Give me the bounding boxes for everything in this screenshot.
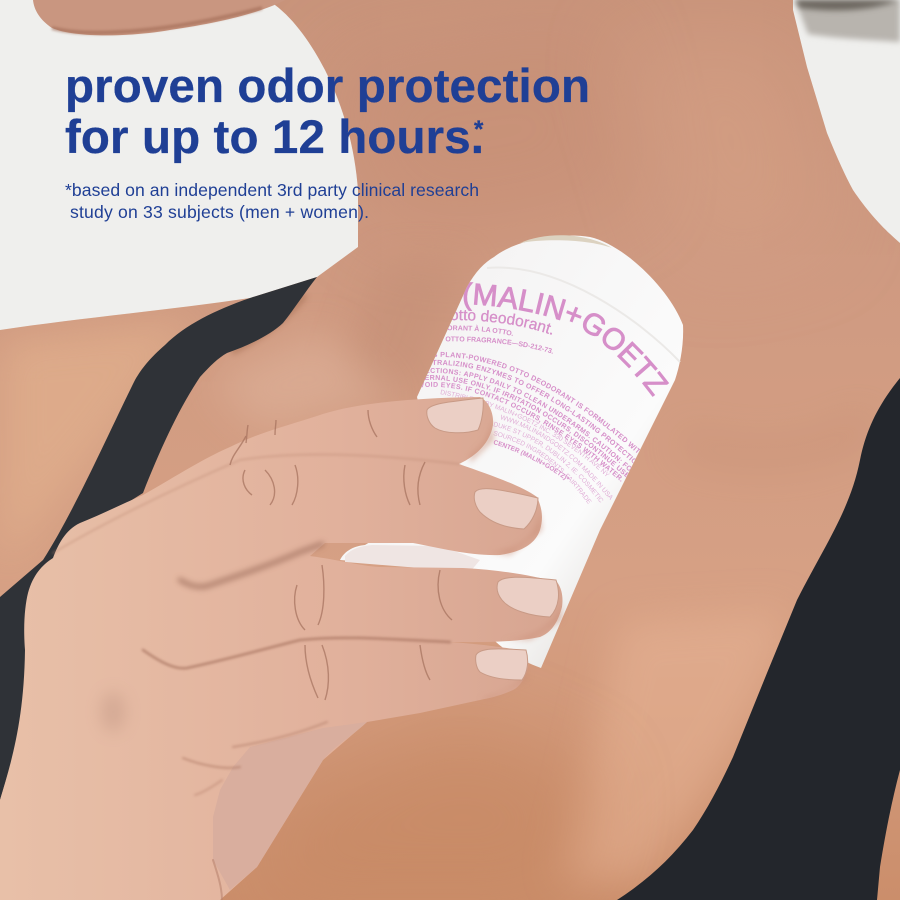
black top: left strap: [0, 277, 317, 800]
black top: right panel: [617, 378, 900, 900]
product label text: NEUTRALIZING ENZYMES TO OFFER LONG-LASTING PROTECTION.: [434, 360, 636, 464]
lower tube shade: [345, 545, 480, 572]
product label text: THIS PLANT-POWERED OTTO DEODORANT IS FORMULATED WITH: [435, 352, 640, 453]
product label text: WWW.MALINANDGOETZ.COM MADE IN USA: [501, 414, 612, 500]
knuckle creases: [230, 410, 452, 700]
product label text: OTTO FRAGRANCE—SD-212-73.: [446, 336, 553, 354]
footnote: *based on an independent 3rd party clinical research: [65, 180, 479, 200]
product label text: AVOID EYES. IF CONTACT OCCURS, RINSE EYES WITH WATER. DM: [422, 382, 622, 482]
product label text: [422, 282, 670, 504]
product label text: SOURCED INGREDIENTS. FAIRTRADE: [494, 431, 592, 504]
fingertip shading: [470, 415, 562, 700]
headline: [65, 60, 590, 164]
headline: *: [474, 116, 484, 143]
chin: [33, 0, 285, 35]
hand silhouette: [0, 397, 562, 900]
headline: proven odor protection: [65, 60, 590, 113]
product label text: DISTRIBUTED BY MALIN+GOETZ INC. 330 SEVENTH AVE NY: [440, 390, 610, 476]
product label text: EXTERNAL USE ONLY. IF IRRITATION OCCURS, DISCONTINUE USE. AVOID: [425, 375, 628, 478]
fingernails: [427, 398, 558, 680]
thumb pad: [213, 722, 367, 890]
hand shadow folds: [53, 454, 459, 900]
deodorant stick: [340, 235, 684, 668]
product label text: otto deodorant.: [452, 310, 552, 335]
product label text: DUKE ST UPPER, DUBLIN 2, IE. COSMETIC: [494, 422, 604, 502]
footnote: study on 33 subjects (men + women).: [70, 202, 369, 222]
back of hand dimple: [101, 692, 125, 732]
headline: for up to 12 hours.: [65, 111, 484, 164]
product label text: DIRECTIONS: APPLY DAILY TO CLEAN UNDERARMS. CAUTION: FOR: [428, 368, 632, 471]
footnote: [65, 180, 479, 222]
cap rim highlight: [520, 235, 612, 248]
hand: [0, 397, 562, 900]
hair wisps: [795, 0, 900, 42]
product label text: (MALIN+GOETZ: [464, 282, 670, 397]
product label text: DÉODORANT À LA OTTO.: [448, 324, 513, 336]
product label text: CENTER (MALIN+GOETZ)*: [494, 440, 570, 480]
product body and cap: [340, 236, 683, 668]
